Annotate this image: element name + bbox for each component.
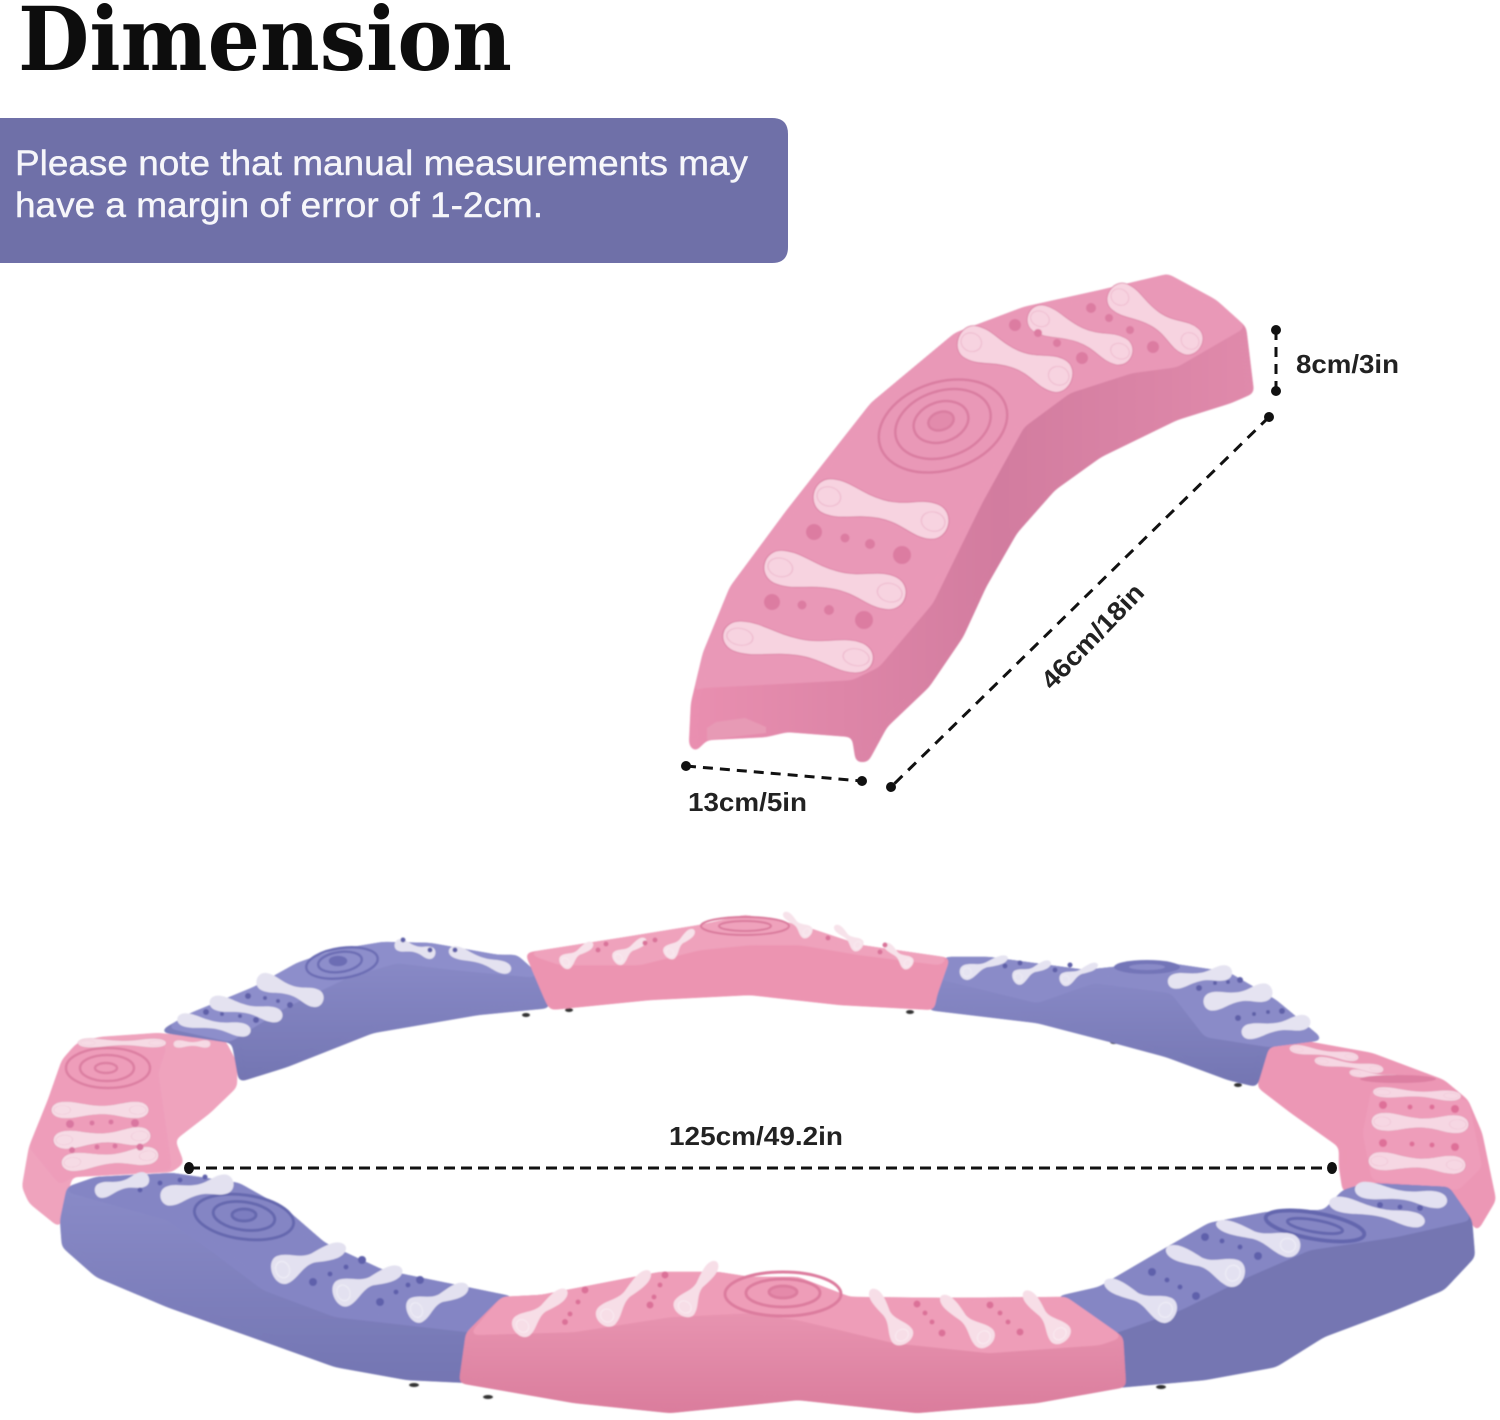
dimension: ring diameter 125cm	[184, 1121, 1337, 1174]
concentric ring pad	[867, 364, 1019, 488]
segment: pink right	[1257, 1040, 1496, 1232]
dimension: height 8cm: 8cm/3in	[1296, 349, 1399, 379]
segment: purple bottom-left	[60, 1170, 515, 1383]
end tab	[707, 718, 766, 740]
support feet	[409, 1008, 1242, 1399]
segment: pink top-center	[525, 907, 950, 1010]
beam side body	[689, 274, 1254, 762]
product: assembled ring of beams	[22, 907, 1496, 1413]
beam top face	[691, 274, 1246, 703]
dimension: width 13cm: 13cm/5in	[688, 787, 807, 817]
massage dots	[764, 303, 1159, 629]
segment: purple top-right	[928, 950, 1324, 1087]
dimension: length 46cm: 46cm/18in	[1035, 577, 1150, 695]
dimension: width 13cm	[681, 761, 867, 817]
segment: pink bottom-center	[459, 1255, 1126, 1413]
dimension: length 46cm	[886, 412, 1274, 792]
segment: pink left	[22, 1033, 237, 1228]
segment: purple bottom-right	[1055, 1180, 1475, 1388]
dimension: height 8cm	[1271, 325, 1399, 396]
callout: measurement note: Please note that manual measurements may	[15, 144, 749, 183]
product: single balance beam piece	[689, 274, 1254, 762]
callout: measurement note: have a margin of error of 1-2cm.	[15, 186, 543, 225]
segment: purple top-left	[158, 938, 550, 1082]
dimension: ring diameter 125cm: 125cm/49.2in	[669, 1121, 843, 1151]
callout: measurement note	[0, 118, 788, 263]
grip pads	[720, 278, 1208, 676]
